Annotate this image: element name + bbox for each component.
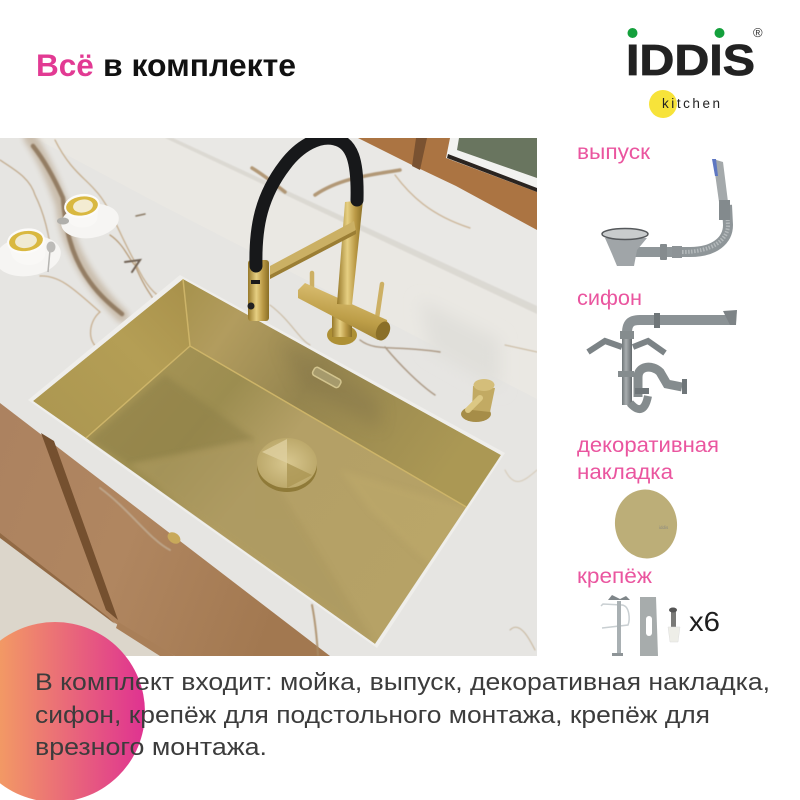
black hose xyxy=(256,138,357,266)
window xyxy=(446,138,537,192)
lower column xyxy=(332,315,352,337)
icon: mounting hardware xyxy=(601,595,720,656)
label: крепёж: крепёж xyxy=(577,565,652,588)
cabinet door divider xyxy=(41,433,118,620)
icon: decorative cover xyxy=(611,486,681,562)
sink floor xyxy=(86,346,501,644)
countertop xyxy=(0,138,537,656)
label: декоративная накладка: накладка xyxy=(577,461,673,484)
logo: IDDIS kitchen xyxy=(626,25,763,122)
wood window frame xyxy=(358,138,537,230)
cabinet knob xyxy=(168,532,180,544)
small screw xyxy=(668,608,680,642)
overflow slot xyxy=(311,366,342,389)
label: выпуск: выпуск xyxy=(577,141,651,164)
shelf edge strip xyxy=(165,138,537,314)
metal plate xyxy=(640,597,658,656)
base disk xyxy=(327,328,357,345)
soap dispenser xyxy=(461,379,495,422)
mixer body xyxy=(298,283,388,340)
description text: врезного монтажа. xyxy=(35,734,267,761)
label: сифон: сифон xyxy=(577,287,642,310)
upper shelf marble xyxy=(173,138,537,310)
description text xyxy=(35,669,770,761)
faucet xyxy=(248,138,393,345)
clamp bolt xyxy=(601,595,630,656)
handle levers xyxy=(312,273,382,318)
icon: decorative cover: iddis xyxy=(659,525,669,530)
logo: IDDIS kitchen: IDDIS xyxy=(626,36,755,85)
floor tiles xyxy=(0,535,175,656)
gradient circle xyxy=(0,622,145,800)
pull arm xyxy=(270,221,356,279)
label: декоративная накладка xyxy=(577,434,719,484)
wood cabinet xyxy=(0,403,330,656)
logo: IDDIS kitchen: ® xyxy=(753,25,763,40)
icon: siphon xyxy=(588,310,737,409)
quantity: x6 xyxy=(689,606,720,637)
back wall band xyxy=(35,138,539,400)
logo: IDDIS kitchen: kitchen xyxy=(662,96,720,111)
sink bowl xyxy=(28,275,505,648)
description text: В комплект входит: мойка, выпуск, декоративная накладка, xyxy=(35,669,770,696)
coffee cups xyxy=(0,192,121,280)
shadow on back wall xyxy=(432,318,493,372)
pull-out head xyxy=(248,260,269,321)
title: в комплекте xyxy=(103,47,296,83)
icon: drain outlet xyxy=(602,159,730,266)
photo: kitchen sink on marble countertop xyxy=(0,138,539,656)
upper column xyxy=(337,200,363,305)
sink left wall xyxy=(33,279,190,438)
label: декоративная накладка: декоративная xyxy=(577,434,719,457)
drain plug xyxy=(257,465,317,492)
description text: сифон, крепёж для подстольного монтажа, крепёж для xyxy=(35,702,710,729)
title: Всё xyxy=(36,47,94,83)
sink back corner wall xyxy=(183,279,501,508)
marble veins xyxy=(0,138,537,655)
